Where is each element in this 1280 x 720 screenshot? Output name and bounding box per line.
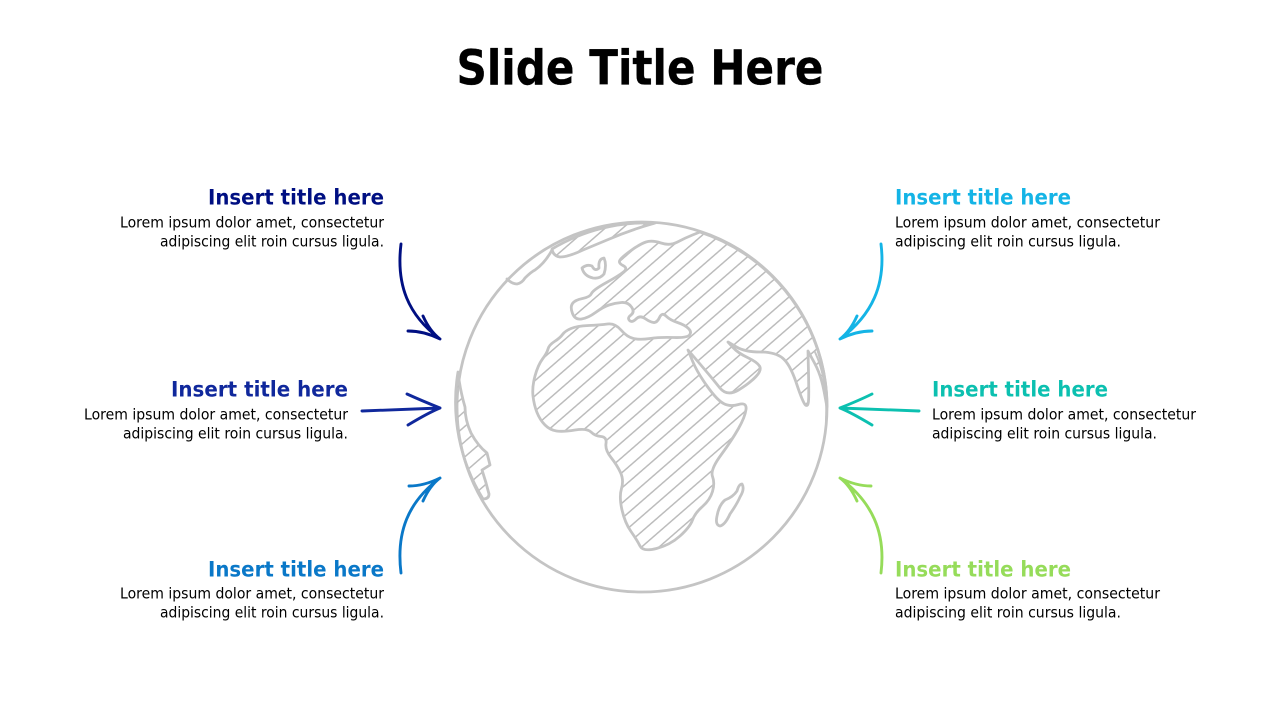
heading: Insert title here — [208, 558, 384, 582]
body text: Lorem ipsum dolor amet, consectetur — [895, 584, 1161, 602]
globe outline — [457, 222, 827, 592]
heading: Insert title here — [208, 186, 384, 210]
arrow: middle right — [840, 394, 919, 425]
arrow: bottom right — [840, 478, 882, 573]
landmass: Eurasia and Africa — [533, 232, 827, 550]
body text: Lorem ipsum dolor amet, consectetur — [120, 214, 385, 232]
body text — [895, 584, 1161, 622]
Arctic coast line — [507, 250, 552, 284]
block: top right — [895, 186, 1161, 250]
body text: adipiscing elit roin cursus ligula. — [895, 232, 1121, 250]
body text — [120, 214, 385, 250]
body text: adipiscing elit roin cursus ligula. — [895, 604, 1121, 622]
block: middle left — [84, 378, 349, 442]
arrow: top right — [840, 244, 882, 339]
sketch double stroke — [815, 352, 826, 420]
body text: Lorem ipsum dolor amet, consectetur — [120, 584, 385, 602]
title: Slide Title Here — [456, 40, 824, 96]
body text: Lorem ipsum dolor amet, consectetur — [932, 406, 1197, 424]
Madagascar — [716, 484, 743, 526]
Greenland patch — [552, 223, 655, 257]
heading: Insert title here — [895, 186, 1071, 210]
South America patch — [456, 372, 490, 499]
block: bottom left — [120, 558, 385, 622]
body text: Lorem ipsum dolor amet, consectetur — [84, 406, 349, 424]
body text — [84, 406, 349, 442]
heading: Insert title here — [171, 378, 348, 402]
body text — [932, 406, 1197, 442]
heading: Insert title here — [932, 378, 1108, 402]
body text: adipiscing elit roin cursus ligula. — [160, 232, 384, 250]
heading: Insert title here — [895, 558, 1071, 582]
body text — [895, 214, 1161, 250]
block: middle right — [932, 378, 1197, 442]
body text: adipiscing elit roin cursus ligula. — [160, 604, 384, 622]
globe illustration — [456, 222, 827, 592]
block: bottom right — [895, 558, 1161, 622]
body text — [120, 584, 385, 622]
British Isles — [582, 258, 606, 278]
block: top left — [120, 186, 385, 250]
body text: adipiscing elit roin cursus ligula. — [123, 424, 348, 442]
arrow: top left — [400, 244, 440, 339]
arrow: bottom left — [400, 478, 440, 573]
body text: adipiscing elit roin cursus ligula. — [932, 424, 1157, 442]
body text: Lorem ipsum dolor amet, consectetur — [895, 214, 1161, 232]
arrow: middle left — [362, 394, 440, 425]
